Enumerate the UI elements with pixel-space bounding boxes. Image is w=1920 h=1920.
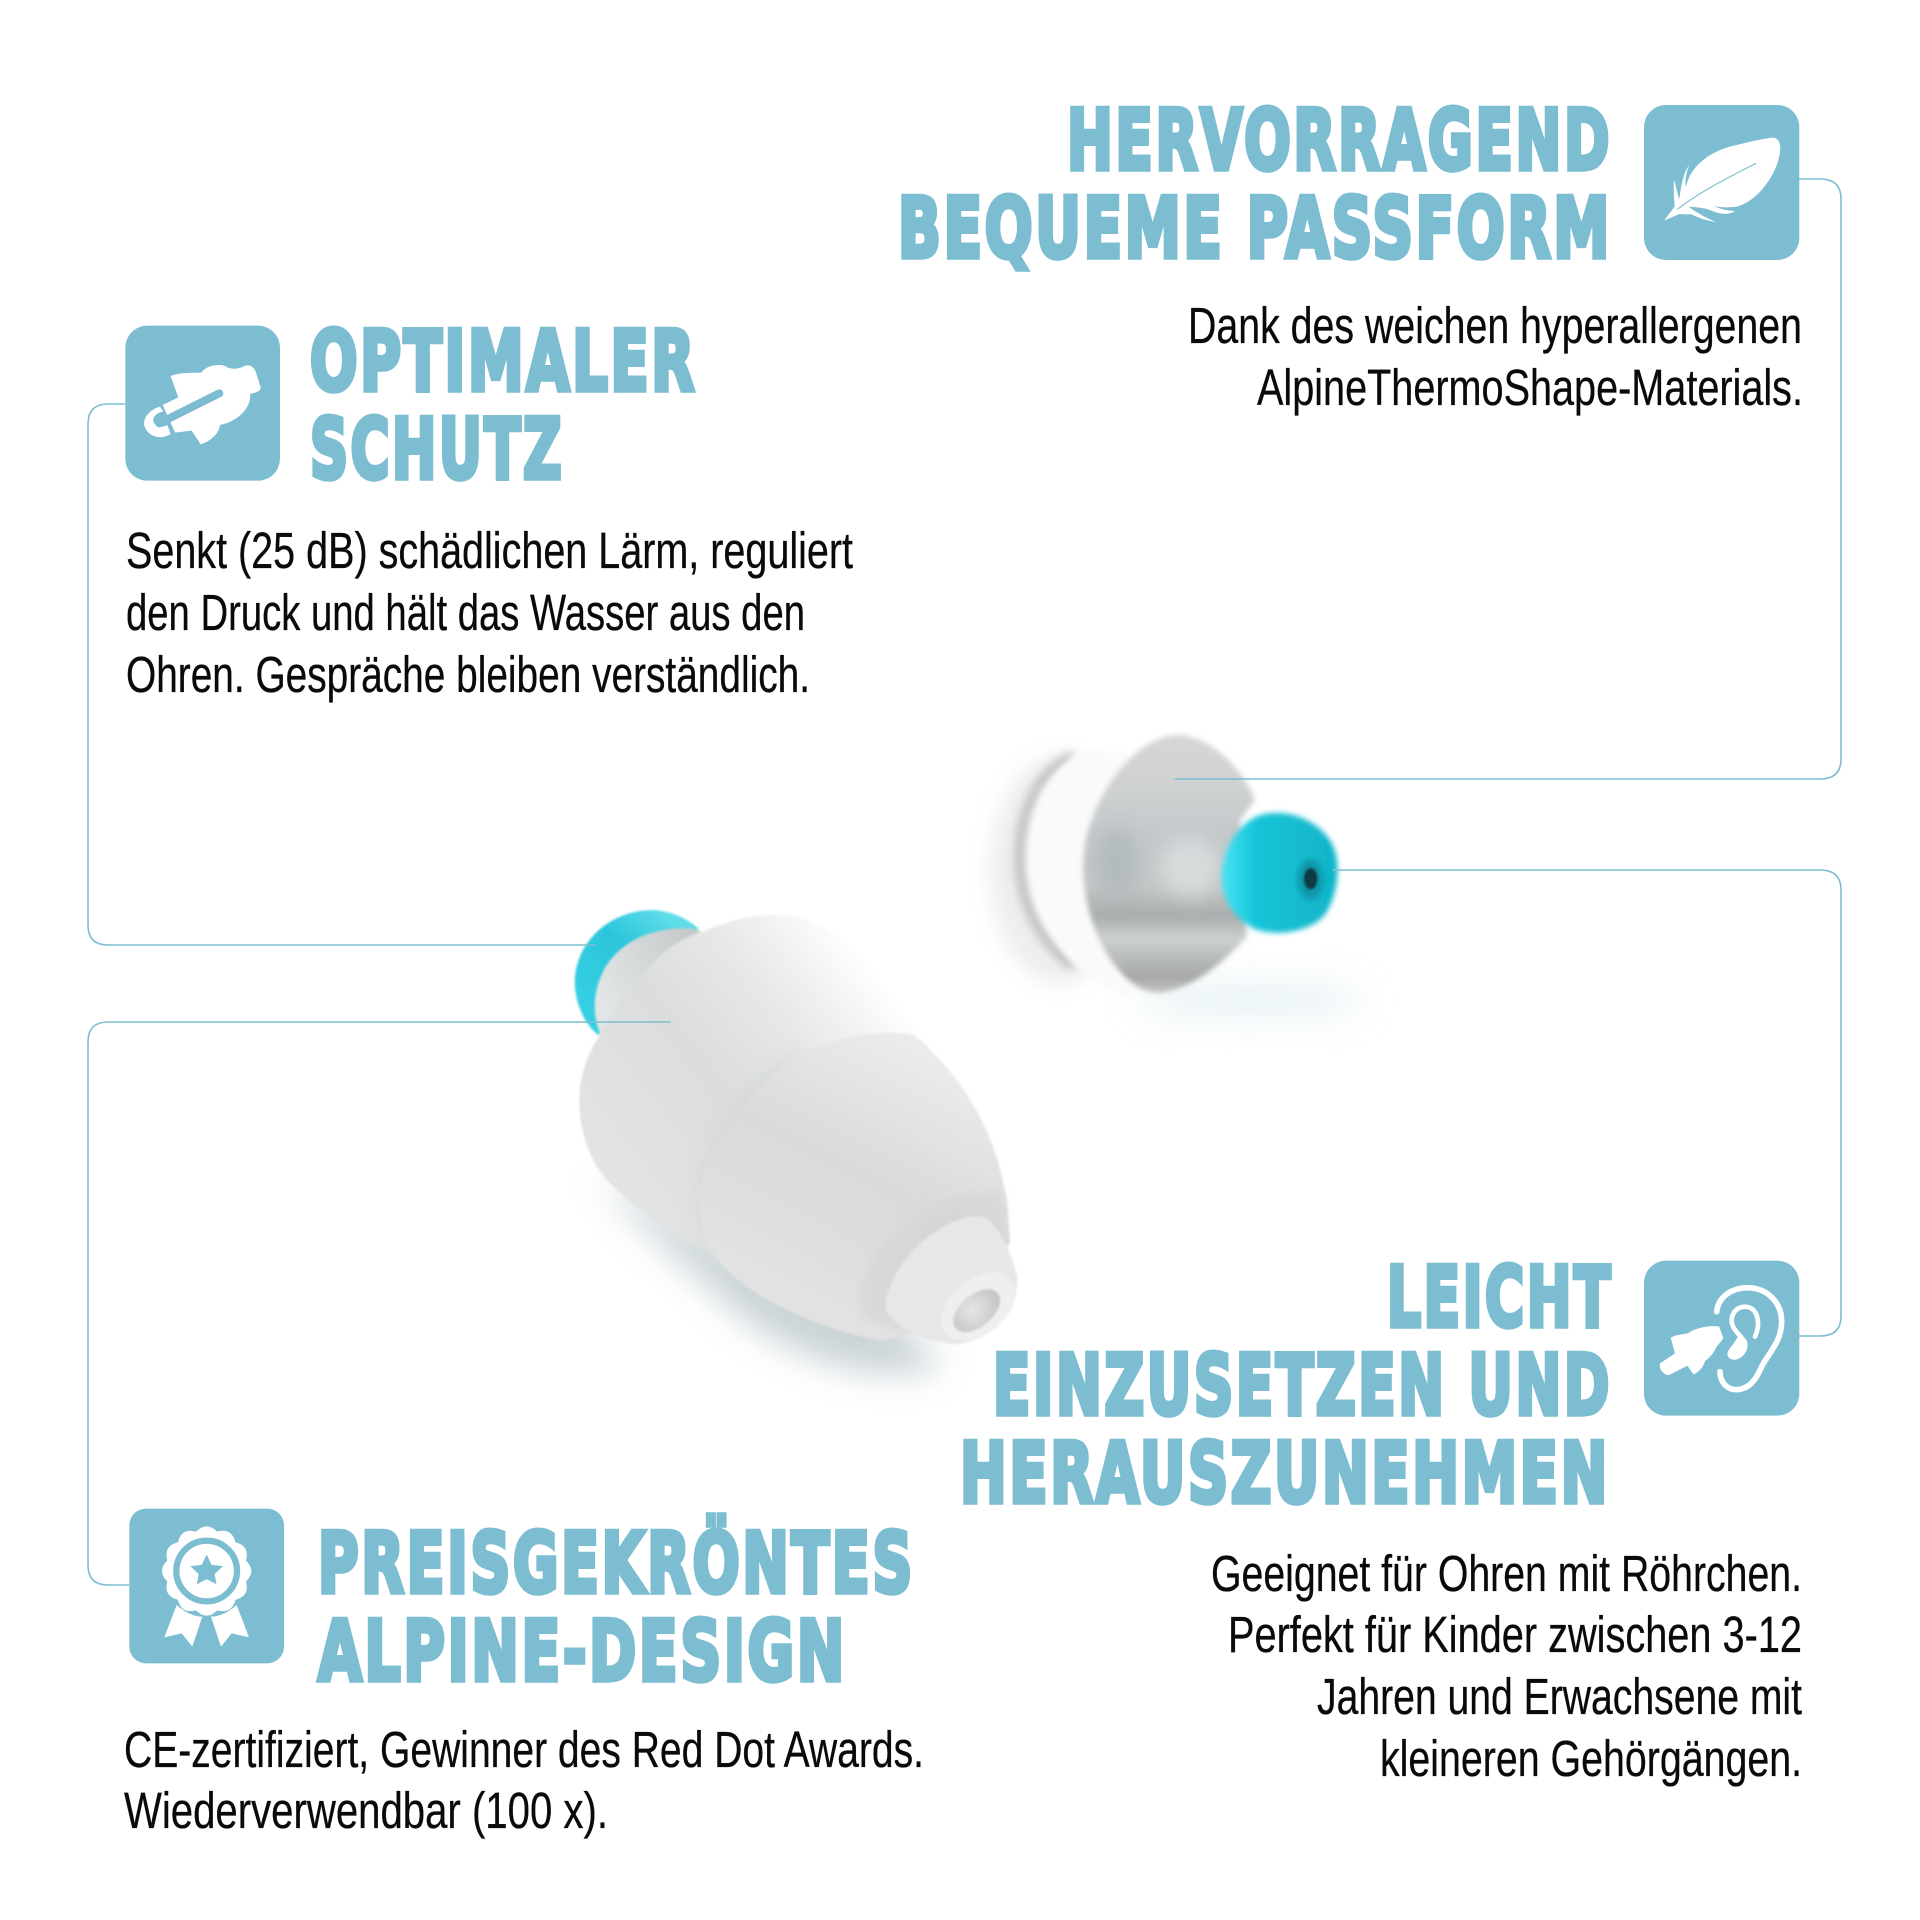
heading — [310, 313, 697, 498]
heading — [318, 1514, 915, 1700]
photo: main earplug in foreground — [575, 910, 1029, 1374]
icon: ear with earplug — [1644, 1261, 1799, 1416]
body text: kleineren Gehörgängen. — [1380, 1730, 1802, 1787]
icon: award rosette — [129, 1509, 284, 1663]
body text — [1188, 297, 1803, 416]
photo: blurred rear earplug — [990, 735, 1363, 1020]
panel: easy to insert and remove — [960, 1249, 1802, 1787]
icon: feather — [1644, 105, 1799, 260]
body text — [124, 1721, 924, 1839]
heading: SCHUTZ — [310, 401, 564, 498]
body text: den Druck und hält das Wasser aus den — [126, 584, 805, 641]
heading: OPTIMALER — [310, 313, 697, 410]
body text: Wiederverwendbar (100 x). — [124, 1782, 608, 1839]
body text — [126, 522, 853, 703]
heading — [960, 1249, 1613, 1522]
heading: PREISGEKRÖNTES — [318, 1514, 915, 1612]
heading: EINZUSETZEN UND — [993, 1337, 1612, 1434]
body text: Senkt (25 dB) schädlichen Lärm, reguliert — [126, 522, 853, 579]
body text: CE-zertifiziert, Gewinner des Red Dot Awards. — [124, 1721, 924, 1778]
heading — [898, 92, 1612, 277]
panel: optimal protection — [125, 313, 853, 703]
heading: HERVORRAGEND — [1067, 92, 1612, 189]
heading: HERAUSZUNEHMEN — [960, 1425, 1610, 1522]
connector lines — [88, 179, 1841, 1585]
body text: Ohren. Gespräche bleiben verständlich. — [126, 646, 810, 703]
panel: award-winning design — [124, 1509, 924, 1839]
panel: comfortable fit — [898, 92, 1803, 416]
body text — [1211, 1545, 1802, 1787]
icon: earplug — [125, 326, 280, 481]
heading: LEICHT — [1387, 1249, 1613, 1346]
heading: ALPINE-DESIGN — [318, 1603, 847, 1700]
